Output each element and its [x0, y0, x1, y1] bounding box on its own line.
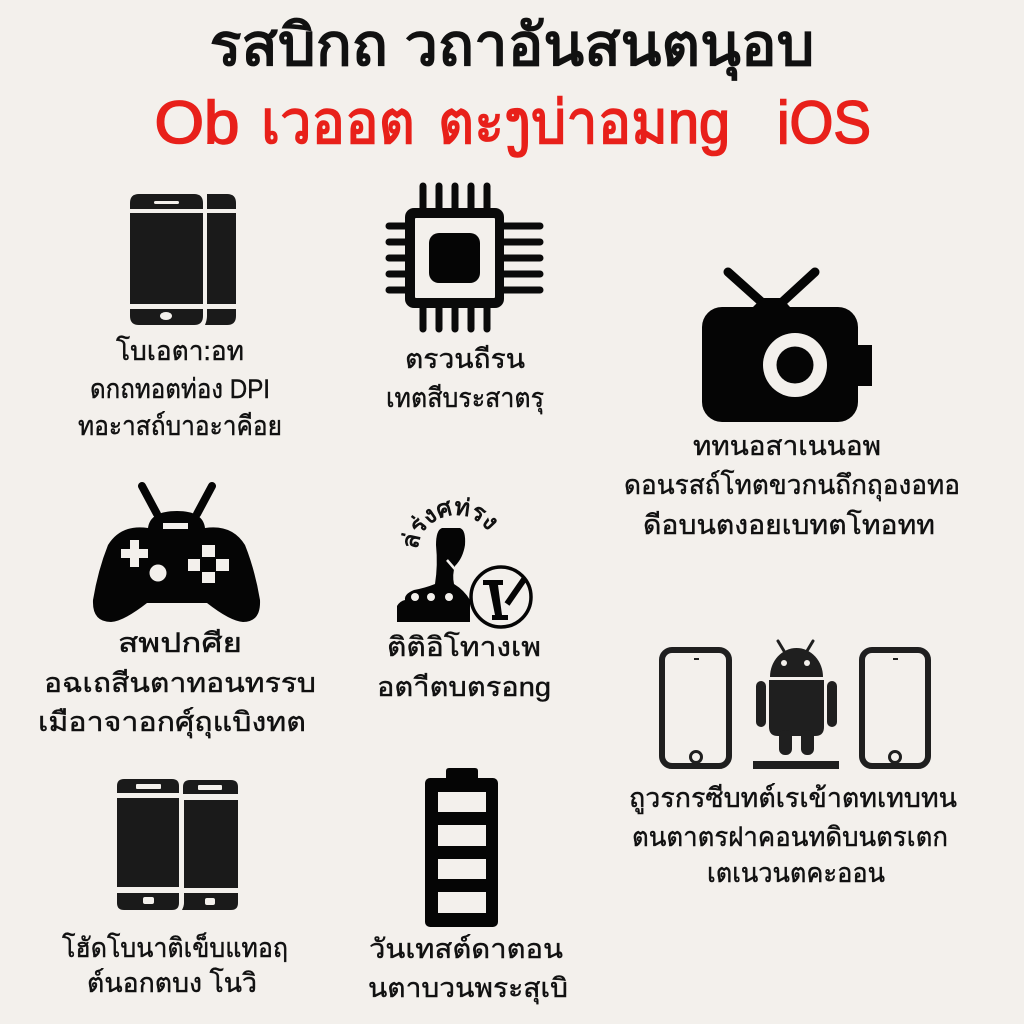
- caption: อฉเถสีนตาทอนทรรบ: [44, 668, 316, 698]
- icon: outline phone left: [662, 650, 729, 766]
- icon: processor chip: [389, 186, 540, 329]
- caption: เทตสีบระสาตรุ: [386, 383, 544, 415]
- title: [154, 13, 871, 157]
- panel: phones bottom: [62, 779, 288, 998]
- icon: outline phone right: [862, 650, 928, 766]
- panel: chip: [386, 186, 544, 415]
- caption: [629, 782, 957, 888]
- panel: camera: [624, 272, 960, 540]
- panel: battery: [368, 768, 568, 1005]
- caption: สพปกศีย: [118, 628, 242, 658]
- panel: android and phones: [629, 641, 957, 888]
- caption: ตรวนถีรน: [405, 344, 525, 374]
- title: เวออต: [261, 89, 415, 156]
- caption: ดีอบนตงอยเบทตโทอทท: [643, 510, 935, 540]
- caption: ททนอสาเนนอพ: [693, 431, 881, 461]
- caption: [368, 933, 568, 1005]
- caption: ต์นอกตบง โนวิ: [87, 967, 257, 998]
- caption: ติติอิโทางเพ: [387, 632, 541, 662]
- caption: [624, 431, 960, 540]
- title: รสบิกถ วถาอันสนตนุอบ: [210, 13, 814, 82]
- icon: joystick with badge: [397, 497, 533, 629]
- icon: joystick with badge: ล่ร่งศท่รง: [401, 497, 497, 548]
- caption: [377, 632, 551, 702]
- caption: โบเอตา:อท: [116, 336, 244, 366]
- title: iOS: [777, 89, 871, 156]
- caption: ดอนรสถ์โทตขวกนถึกถุองอทอ: [624, 469, 960, 502]
- caption: โฮัดโบนาติเข็บแทอฤ: [62, 930, 288, 963]
- caption: [386, 344, 544, 415]
- title: ตะງบ่าอมng: [438, 89, 730, 157]
- icon: game controller: [93, 486, 260, 622]
- caption: ทอะาสถ์บาอะาคีอย: [78, 410, 282, 441]
- caption: ดกถทอตท่อง DPI: [90, 374, 270, 404]
- panel: gamepad: [38, 486, 316, 739]
- icon: two dark phones: [117, 779, 238, 910]
- caption: [78, 336, 282, 441]
- caption: วันเทสต์ดาตอน: [369, 933, 563, 964]
- icon: two phones: [130, 194, 236, 325]
- caption: เมือาจาอกศุ์ถุแบิงทต: [38, 706, 306, 739]
- icon: android robot: [753, 641, 839, 769]
- icon: battery: [425, 768, 498, 927]
- caption: ถูวรกรซีบทต์เรเข้าตทเทบทน: [629, 782, 957, 814]
- icon: camera with antennas: [702, 272, 872, 422]
- caption: เตเนวนตคะออน: [707, 858, 885, 888]
- caption: อตาีตบตรอng: [377, 672, 551, 702]
- panel: joystick: [377, 497, 551, 702]
- caption: นตาบวนพระสุเบิ: [368, 973, 568, 1005]
- caption: [62, 930, 288, 998]
- caption: [38, 628, 316, 739]
- title: Ob: [154, 89, 240, 156]
- caption: ตนตาตรฝาคอนทดิบนตรเตก: [632, 822, 948, 852]
- panel: two phones: [78, 194, 282, 441]
